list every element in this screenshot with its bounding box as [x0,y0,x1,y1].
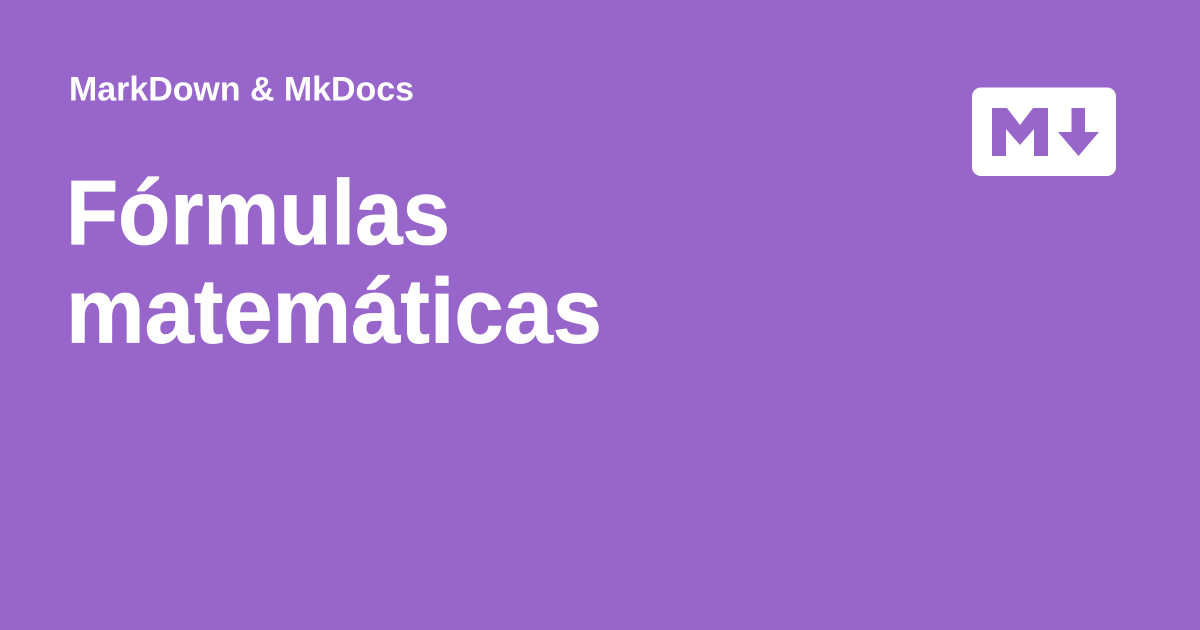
title: Fórmulas [66,162,450,264]
icon: markdown logo [972,88,1116,176]
subtitle: MarkDown & MkDocs [69,70,414,108]
title: matemáticas [66,260,602,362]
title [66,162,602,362]
